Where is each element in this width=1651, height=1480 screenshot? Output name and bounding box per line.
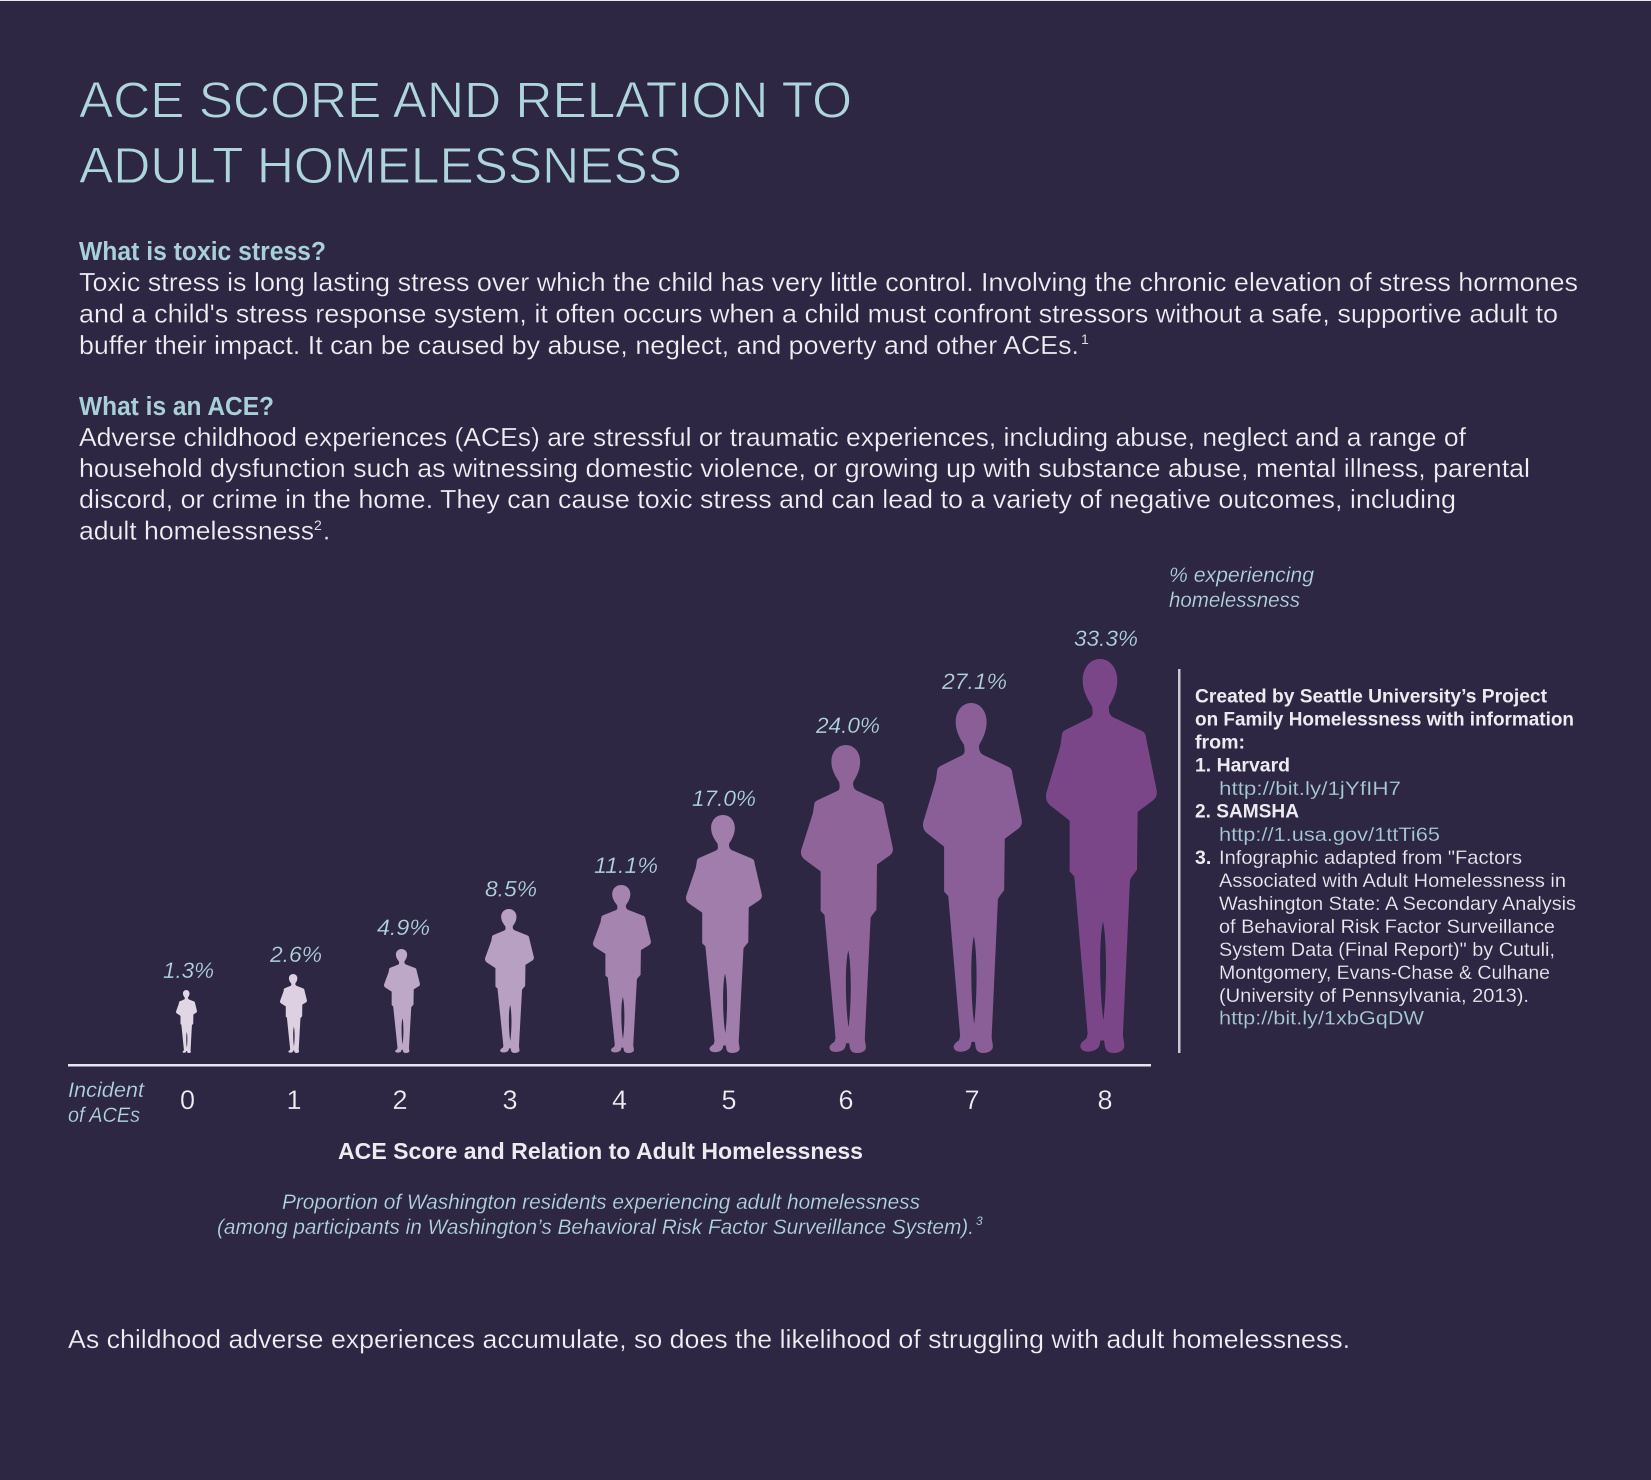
text block: what is toxic stress: 1 [1081,331,1089,347]
figure: 1 ACE, 2.6% [269,942,322,1053]
title: ADULT HOMELESSNESS [79,137,682,194]
figure: 0 ACEs, 1.3%: 1.3% [163,958,214,983]
text block: what is an ACE: Adverse childhood experiences (ACEs) are stressful or traumatic experiences, including abuse, neglect and a range of [79,422,1467,452]
pictogram chart [163,626,1157,1053]
sources panel: on Family Homelessness with information [1195,708,1574,730]
chart caption: 3 [976,1214,983,1228]
sources panel: 3. [1195,847,1211,869]
text block: what is toxic stress [79,238,1578,360]
text block: what is toxic stress: buffer their impact. It can be caused by abuse, neglect, and poverty and other ACEs. [79,330,1079,360]
text block: what is an ACE [79,393,1530,546]
axis labels: ACE counts [180,1085,1113,1115]
sources panel: System Data (Final Report)" by Cutuli, [1219,939,1555,961]
text block: what is toxic stress: and a child's stress response system, it often occurs when a child must confront stressors without a safe, supportive adult to [79,298,1558,328]
figure: 2 ACEs, 4.9% [377,915,430,1053]
axis labels: ACE counts: 5 [721,1085,737,1115]
figure: 6 ACEs, 24.0%: 24.0% [815,713,880,738]
chart legend: percent experiencing homelessness: homelessness [1169,588,1300,612]
axis title: incident of ACEs [68,1078,145,1127]
figure: 8 ACEs, 33.3%: 33.3% [1074,626,1138,651]
figure: 1 ACE, 2.6%: 2.6% [269,942,322,967]
text block: what is an ACE: discord, or crime in the home. They can cause toxic stress and can lead to a variety of negative outcomes, including [79,484,1456,514]
text block: what is an ACE: 2 [314,517,322,533]
chart caption: (among participants in Washington’s Behavioral Risk Factor Surveillance System). [217,1215,974,1239]
sources panel: Infographic adapted from "Factors [1219,847,1522,869]
title [79,72,852,194]
chart legend: percent experiencing homelessness: % experiencing [1169,563,1314,587]
axis labels: ACE counts: 0 [180,1085,195,1115]
conclusion statement: As childhood adverse experiences accumulate, so does the likelihood of struggling with adult homelessness. [68,1324,1350,1354]
figure: 5 ACEs, 17.0% [686,786,762,1053]
sources panel: Created by Seattle University’s Project [1195,686,1547,708]
title: ACE SCORE AND RELATION TO [79,72,852,128]
text block: what is an ACE: household dysfunction such as witnessing domestic violence, or growing up with substance abuse, mental illness, parental [79,453,1530,483]
sources panel: http://bit.ly/1xbGqDW [1219,1008,1425,1030]
figure: 2 ACEs, 4.9%: 4.9% [377,915,430,940]
sources panel: http://1.usa.gov/1ttTi65 [1219,824,1440,846]
divider: sources [1178,669,1180,1053]
axis title: incident of ACEs: of ACEs [68,1103,140,1127]
chart legend: percent experiencing homelessness [1169,563,1314,612]
sources panel: of Behavioral Risk Factor Surveillance [1219,916,1555,938]
text block: what is an ACE: . [323,516,330,546]
sources panel: Montgomery, Evans-Chase & Culhane [1219,962,1550,984]
figure: 6 ACEs, 24.0% [801,713,893,1053]
sources panel: from: [1195,732,1245,754]
axis title: incident of ACEs: Incident [68,1078,145,1102]
sources panel: Washington State: A Secondary Analysis [1219,893,1576,915]
figure: 5 ACEs, 17.0%: 17.0% [692,786,756,811]
chart caption [217,1190,983,1239]
text block: what is toxic stress: What is toxic stress? [79,238,326,266]
axis labels: ACE counts: 8 [1097,1085,1113,1115]
axis labels: ACE counts: 1 [286,1085,302,1115]
figure: 7 ACEs, 27.1% [923,669,1022,1053]
figure: 3 ACEs, 8.5%: 8.5% [485,876,537,902]
sources panel: http://bit.ly/1jYfIH7 [1219,778,1401,800]
sources panel: Associated with Adult Homelessness in [1219,870,1566,892]
axis labels: ACE counts: 2 [392,1085,408,1115]
axis labels: ACE counts: 6 [838,1085,854,1115]
text block: what is toxic stress: Toxic stress is long lasting stress over which the child has very little control. Involving the chronic elevation of stress hormones [79,267,1578,297]
sources panel: (University of Pennsylvania, 2013). [1219,985,1529,1007]
chart baseline [68,1064,1151,1066]
chart title: ACE Score and Relation to Adult Homelessness [338,1138,863,1164]
figure: 7 ACEs, 27.1%: 27.1% [941,669,1007,694]
axis labels: ACE counts: 3 [502,1085,518,1115]
figure: 4 ACEs, 11.1%: 11.1% [594,853,658,878]
sources panel: 2. SAMSHA [1195,800,1299,822]
axis labels: ACE counts: 4 [612,1085,627,1115]
axis labels: ACE counts: 7 [964,1085,980,1115]
figure: 0 ACEs, 1.3% [163,958,214,1053]
figure: 4 ACEs, 11.1% [593,853,658,1053]
figure: 8 ACEs, 33.3% [1046,626,1157,1053]
chart caption: Proportion of Washington residents experiencing adult homelessness [282,1190,920,1214]
text block: what is an ACE: What is an ACE? [79,393,274,421]
figure: 3 ACEs, 8.5% [485,876,537,1053]
text block: what is an ACE: adult homelessness [79,516,314,546]
sources panel: 1. Harvard [1195,754,1290,776]
sources panel [1195,686,1576,1030]
